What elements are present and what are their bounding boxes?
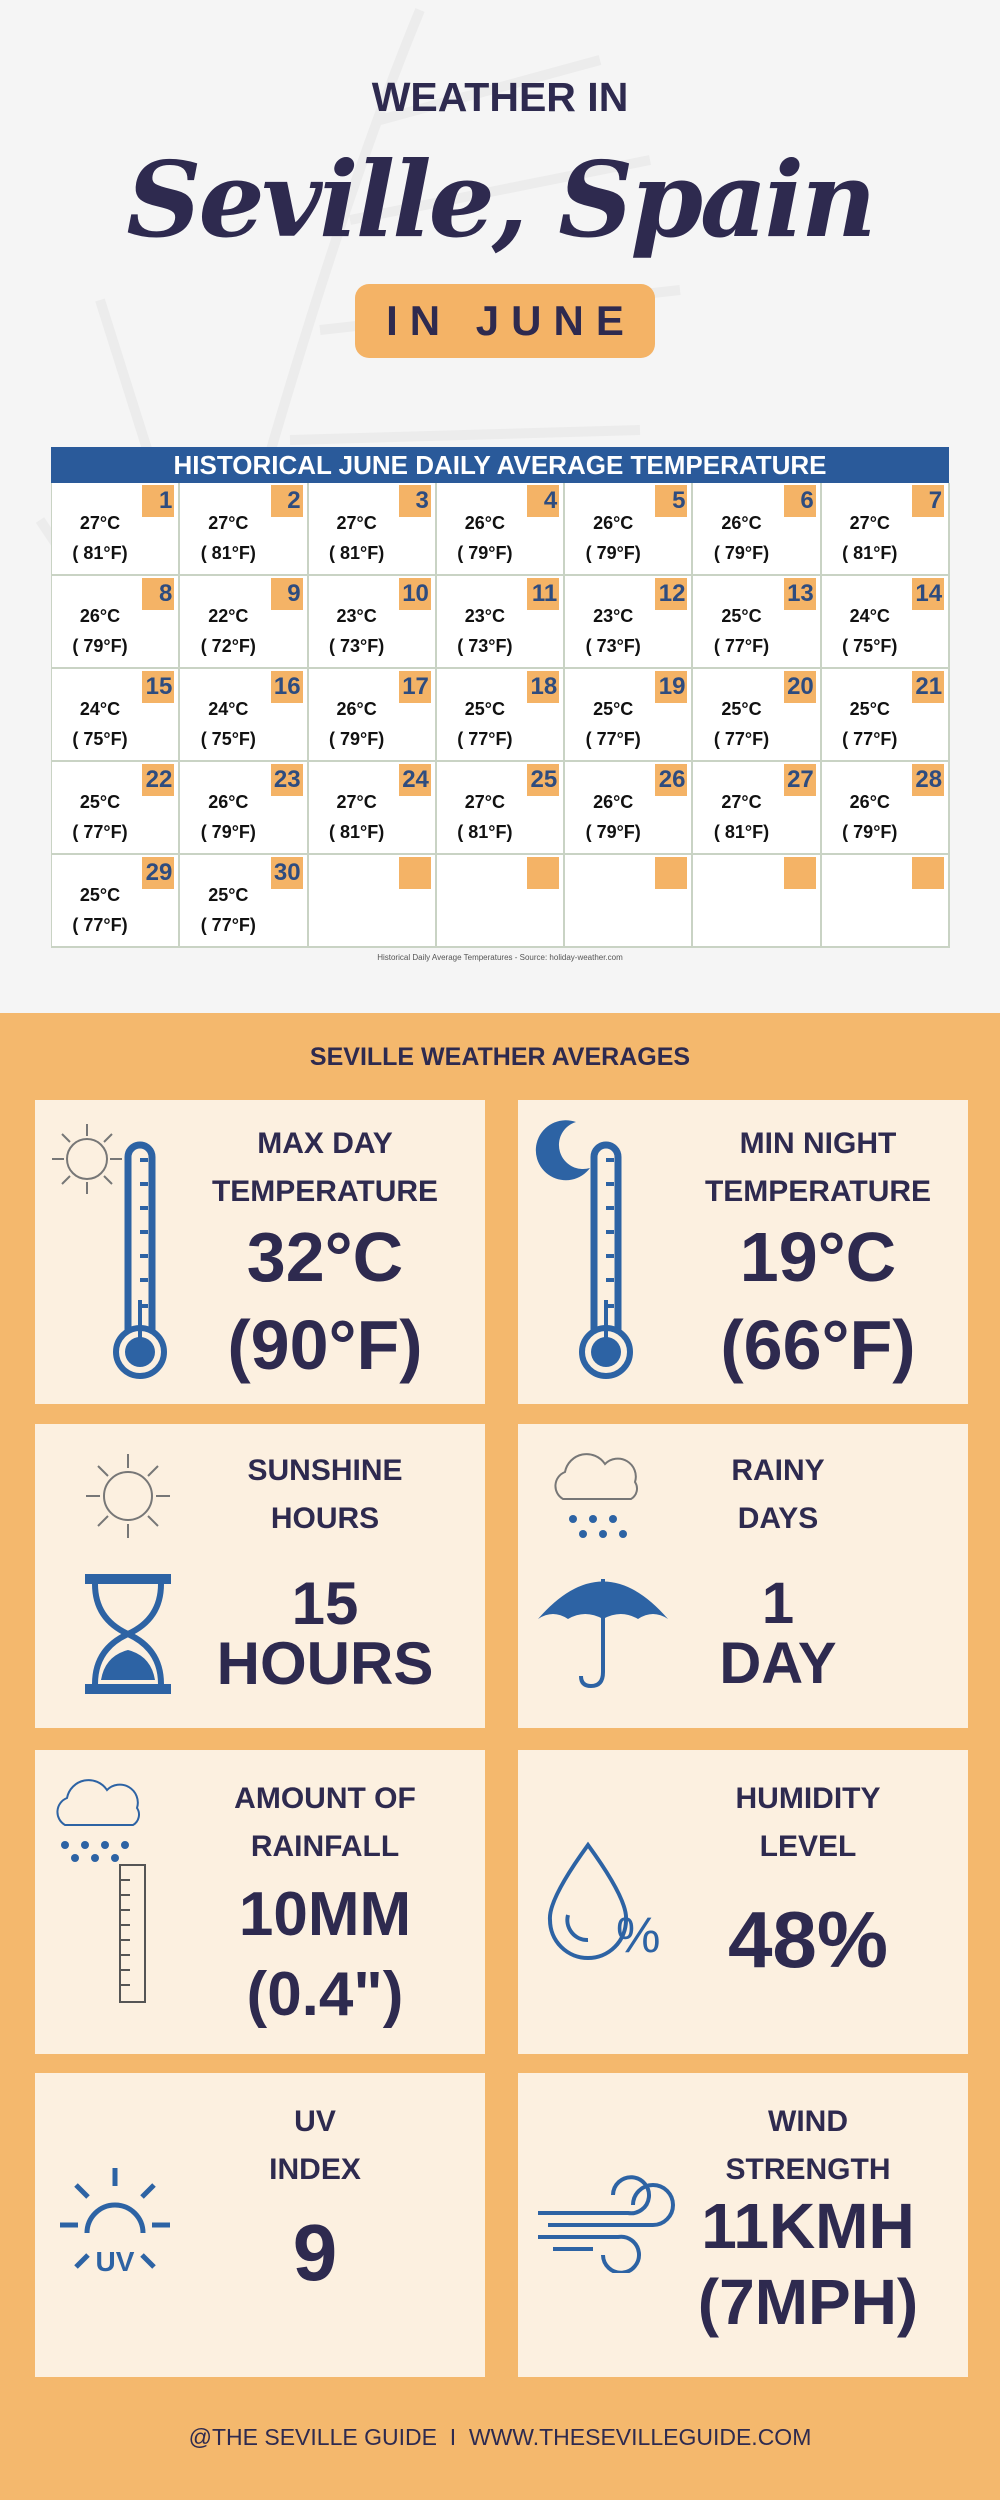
calendar: 4 (544, 487, 557, 514)
calendar: ( 79°F) (586, 543, 641, 563)
label (234, 1782, 416, 1863)
label: MAX DAY (257, 1127, 393, 1160)
calendar: 27°C (465, 792, 505, 812)
calendar: ( 77°F) (457, 729, 512, 749)
panel: humidity level (518, 1750, 968, 2054)
calendar: 21 (915, 673, 942, 700)
calendar: ( 79°F) (329, 729, 384, 749)
value: 11KMH (701, 2190, 915, 2262)
calendar: 9 (287, 580, 301, 607)
calendar: 24°C (850, 606, 890, 626)
value: (66°F) (720, 1306, 916, 1384)
calendar: 25°C (208, 885, 248, 905)
value: DAY (719, 1631, 837, 1696)
calendar: 24°C (208, 699, 248, 719)
panel: amount of rainfall (35, 1750, 485, 2054)
calendar: 25°C (80, 792, 120, 812)
section heading: SEVILLE WEATHER AVERAGES (310, 1043, 690, 1071)
label: TEMPERATURE (212, 1175, 438, 1208)
label: SUNSHINE (247, 1454, 403, 1487)
calendar: 2 (287, 487, 301, 514)
calendar: ( 77°F) (72, 822, 128, 842)
calendar: 25°C (593, 699, 633, 719)
icon: moon and thermometer (536, 1120, 633, 1379)
calendar: 27°C (336, 513, 377, 533)
label: STRENGTH (726, 2153, 890, 2186)
value (227, 1218, 423, 1384)
calendar: ( 77°F) (201, 915, 256, 935)
value (217, 1570, 433, 1697)
icon: uv sun: UV (96, 2246, 135, 2277)
label (269, 2105, 361, 2186)
calendar: ( 81°F) (457, 822, 512, 842)
label: WIND (768, 2105, 848, 2138)
calendar: ( 81°F) (201, 543, 256, 563)
calendar: 26°C (80, 606, 120, 626)
calendar: ( 77°F) (842, 729, 897, 749)
calendar: ( 79°F) (201, 822, 256, 842)
calendar: 25°C (850, 699, 890, 719)
calendar: 26°C (465, 513, 505, 533)
calendar: 27 (787, 766, 814, 793)
calendar (51, 447, 950, 948)
panel: max day temperature (35, 1100, 485, 1404)
value: 48% (728, 1895, 888, 1984)
label: INDEX (269, 2153, 361, 2186)
calendar: 22 (146, 766, 172, 793)
calendar: 25°C (721, 606, 762, 626)
label (726, 2105, 890, 2186)
calendar: 17 (402, 673, 429, 700)
value: 1 (762, 1571, 794, 1636)
icon: drop with percent (548, 1842, 660, 1960)
calendar: ( 81°F) (329, 822, 384, 842)
calendar: ( 77°F) (714, 636, 769, 656)
calendar: 12 (659, 580, 685, 607)
calendar header: HISTORICAL JUNE DAILY AVERAGE TEMPERATURE (174, 450, 826, 480)
calendar: ( 75°F) (842, 636, 897, 656)
value: 19°C (740, 1218, 896, 1296)
calendar: ( 73°F) (329, 636, 384, 656)
icon: sun (86, 1454, 170, 1538)
label (705, 1127, 931, 1208)
calendar: ( 72°F) (201, 636, 256, 656)
calendar: ( 81°F) (329, 543, 384, 563)
calendar: ( 77°F) (714, 729, 769, 749)
calendar: 23°C (465, 606, 505, 626)
value (720, 1218, 916, 1384)
calendar: 29 (146, 859, 172, 886)
icon: cloud, rain and gauge (56, 1779, 146, 2003)
calendar: 26°C (721, 513, 762, 533)
calendar: 27°C (208, 513, 248, 533)
calendar: 6 (800, 487, 814, 514)
background palm leaves (36, 8, 680, 544)
calendar: 3 (416, 487, 429, 514)
calendar: 8 (159, 580, 172, 607)
label (731, 1454, 825, 1535)
value: HOURS (217, 1630, 433, 1697)
label: TEMPERATURE (705, 1175, 931, 1208)
label (247, 1454, 403, 1535)
value (698, 2190, 918, 2338)
panel: rainy days (518, 1424, 968, 1728)
calendar: 25 (530, 766, 557, 793)
calendar: ( 77°F) (586, 729, 641, 749)
calendar: 25°C (465, 699, 505, 719)
calendar: 10 (402, 580, 429, 607)
pill: in june (355, 284, 655, 358)
title: Seville, Spain: Seville, Spain (126, 138, 874, 261)
calendar: 20 (787, 673, 814, 700)
calendar: 23°C (593, 606, 633, 626)
panel: min night temperature (518, 1100, 968, 1404)
calendar: 26°C (336, 699, 377, 719)
panel: wind strength (518, 2073, 968, 2377)
calendar header (51, 447, 949, 483)
calendar: ( 73°F) (457, 636, 512, 656)
calendar: 22°C (208, 606, 248, 626)
orange section (0, 1013, 1000, 2500)
calendar: 5 (672, 487, 685, 514)
label: HUMIDITY (736, 1782, 880, 1815)
value: 9 (293, 2208, 337, 2297)
calendar: ( 81°F) (714, 822, 769, 842)
calendar: 24 (402, 766, 429, 793)
calendar: ( 79°F) (842, 822, 897, 842)
value (239, 1880, 411, 2029)
value: 15 (292, 1570, 358, 1637)
panel: sunshine hours (35, 1424, 485, 1728)
calendar: 16 (274, 673, 301, 700)
label: RAINFALL (251, 1830, 399, 1863)
value: (90°F) (227, 1306, 423, 1384)
calendar: 26°C (593, 513, 633, 533)
calendar: 27°C (336, 792, 377, 812)
icon: wind (538, 2175, 675, 2273)
value: 32°C (247, 1218, 403, 1296)
calendar: 19 (659, 673, 685, 700)
label: LEVEL (760, 1830, 856, 1863)
calendar: 18 (530, 673, 557, 700)
label: HOURS (271, 1502, 379, 1535)
calendar: ( 79°F) (714, 543, 769, 563)
calendar: 27°C (721, 792, 762, 812)
calendar: ( 73°F) (586, 636, 641, 656)
label: MIN NIGHT (740, 1127, 896, 1160)
calendar: 14 (915, 580, 942, 607)
calendar: 27°C (850, 513, 890, 533)
icon: umbrella (538, 1579, 668, 1688)
icon: hourglass (85, 1574, 171, 1694)
calendar: 13 (787, 580, 814, 607)
calendar: ( 79°F) (72, 636, 128, 656)
value (719, 1571, 837, 1696)
calendar: 26°C (850, 792, 890, 812)
calendar: ( 75°F) (72, 729, 128, 749)
label (736, 1782, 880, 1863)
value: (7MPH) (698, 2266, 918, 2338)
calendar: ( 79°F) (457, 543, 512, 563)
calendar: 15 (146, 673, 172, 700)
calendar: 28 (915, 766, 942, 793)
value: 10MM (239, 1880, 411, 1949)
calendar: ( 77°F) (72, 915, 128, 935)
icon: sun and thermometer (52, 1124, 167, 1379)
calendar: ( 79°F) (586, 822, 641, 842)
calendar: 26 (659, 766, 685, 793)
label: AMOUNT OF (234, 1782, 416, 1815)
calendar: 26°C (593, 792, 633, 812)
icon: cloud with rain (554, 1453, 638, 1538)
label (212, 1127, 438, 1208)
calendar: 7 (929, 487, 942, 514)
pill: in june: IN JUNE (386, 297, 636, 344)
calendar: 30 (274, 859, 301, 886)
calendar: 25°C (80, 885, 120, 905)
label: RAINY (731, 1454, 825, 1487)
calendar: 27°C (80, 513, 120, 533)
calendar: 24°C (80, 699, 120, 719)
title: weather in: WEATHER IN (372, 74, 628, 120)
calendar: 1 (159, 487, 172, 514)
panel: uv index (35, 2073, 485, 2377)
calendar: 23 (274, 766, 301, 793)
calendar: ( 81°F) (72, 543, 128, 563)
calendar: 11 (532, 580, 557, 607)
label: DAYS (738, 1502, 818, 1535)
value: (0.4") (247, 1960, 403, 2029)
calendar: ( 81°F) (842, 543, 897, 563)
calendar: ( 75°F) (201, 729, 256, 749)
label: UV (294, 2105, 336, 2138)
calendar: 23°C (336, 606, 377, 626)
calendar: 26°C (208, 792, 248, 812)
icon: uv sun (60, 2168, 170, 2277)
source note: Historical Daily Average Temperatures - Source: holiday-weather.com (377, 953, 623, 962)
footer: @THE SEVILLE GUIDE I WWW.THESEVILLEGUIDE.COM (189, 2424, 811, 2450)
calendar: 25°C (721, 699, 762, 719)
